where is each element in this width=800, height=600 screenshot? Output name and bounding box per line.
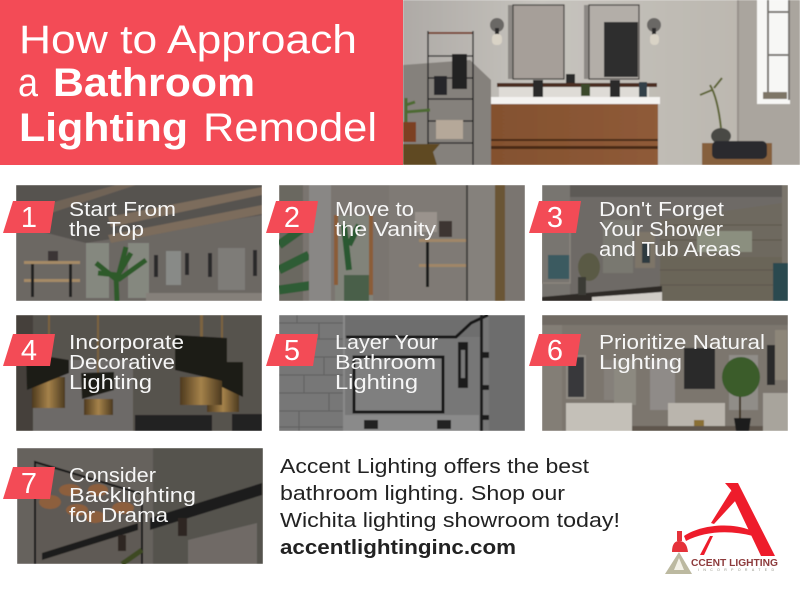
number badge: 5 xyxy=(284,335,300,367)
card 1: Start From the Top xyxy=(3,185,262,301)
card title: Lighting xyxy=(599,352,682,374)
card title: and Tub Areas xyxy=(599,239,741,261)
title: How to Approach xyxy=(19,18,357,62)
card title: Incorporate xyxy=(69,332,184,354)
number badge xyxy=(266,334,318,367)
card title xyxy=(335,332,438,394)
card title: for Drama xyxy=(69,505,169,527)
card title: Lighting xyxy=(69,372,152,394)
card title: Backlighting xyxy=(69,485,196,507)
card photo xyxy=(16,315,262,431)
logo wordmark: CCENT LIGHTING xyxy=(691,558,778,569)
card title xyxy=(69,332,184,394)
card title: the Vanity xyxy=(335,219,436,241)
card 4: Incorporate Decorative Lighting xyxy=(3,315,262,431)
card 7: Consider Backlighting for Drama xyxy=(3,448,263,564)
card 3: Don't Forget Your Shower and Tub Areas xyxy=(529,185,788,301)
card 6: Prioritize Natural Lighting xyxy=(529,315,788,431)
card title: Layer Your xyxy=(335,332,438,354)
number badge: 2 xyxy=(284,202,300,234)
card title: Don't Forget xyxy=(599,199,724,221)
card 5: Layer Your Bathroom Lighting xyxy=(266,315,525,431)
number badge: 4 xyxy=(21,335,37,367)
number badge xyxy=(3,467,55,500)
card 2: Move to the Vanity xyxy=(266,185,525,301)
card title xyxy=(599,199,741,261)
call to action text: Wichita lighting showroom today! xyxy=(280,510,620,532)
title: a xyxy=(18,61,39,105)
card photo xyxy=(279,315,525,431)
card title xyxy=(69,199,176,241)
number badge: 6 xyxy=(547,335,563,367)
card title: Move to xyxy=(335,199,414,221)
card photo xyxy=(17,448,263,564)
number badge: 1 xyxy=(21,202,37,234)
card title xyxy=(599,332,765,374)
title panel xyxy=(0,0,403,165)
card title: Prioritize Natural xyxy=(599,332,765,354)
number badge xyxy=(529,334,581,367)
header banner xyxy=(0,0,800,165)
number badge xyxy=(3,334,55,367)
title: Remodel xyxy=(203,106,377,150)
logo: Accent Lighting xyxy=(665,483,778,574)
number badge xyxy=(266,201,318,234)
title: Lighting xyxy=(19,106,188,150)
card title: Decorative xyxy=(69,352,175,374)
card title: Bathroom xyxy=(335,352,436,374)
card photo xyxy=(542,185,788,301)
card photo xyxy=(16,185,262,301)
title xyxy=(18,18,377,150)
card title xyxy=(335,199,436,241)
call to action text: Accent Lighting offers the best xyxy=(280,456,589,478)
header photo: bathroom vanity xyxy=(403,0,800,165)
card photo xyxy=(279,185,525,301)
call to action text: bathroom lighting. Shop our xyxy=(280,483,565,505)
number badge: 7 xyxy=(21,468,37,500)
card title: Start From xyxy=(69,199,176,221)
title: Bathroom xyxy=(53,61,255,105)
logo tagline: INCORPORATED xyxy=(698,568,774,572)
card title: the Top xyxy=(69,219,144,241)
card title: Consider xyxy=(69,465,156,487)
number badge xyxy=(529,201,581,234)
card title xyxy=(69,465,196,527)
number badge xyxy=(3,201,55,234)
call to action text: accentlightinginc.com xyxy=(280,537,516,559)
card title: Lighting xyxy=(335,372,418,394)
icon: red letter A xyxy=(684,483,775,556)
number badge: 3 xyxy=(547,202,563,234)
card photo xyxy=(542,315,788,431)
icon: lamp xyxy=(665,531,692,574)
card title: Your Shower xyxy=(599,219,723,241)
call to action text xyxy=(280,456,620,559)
